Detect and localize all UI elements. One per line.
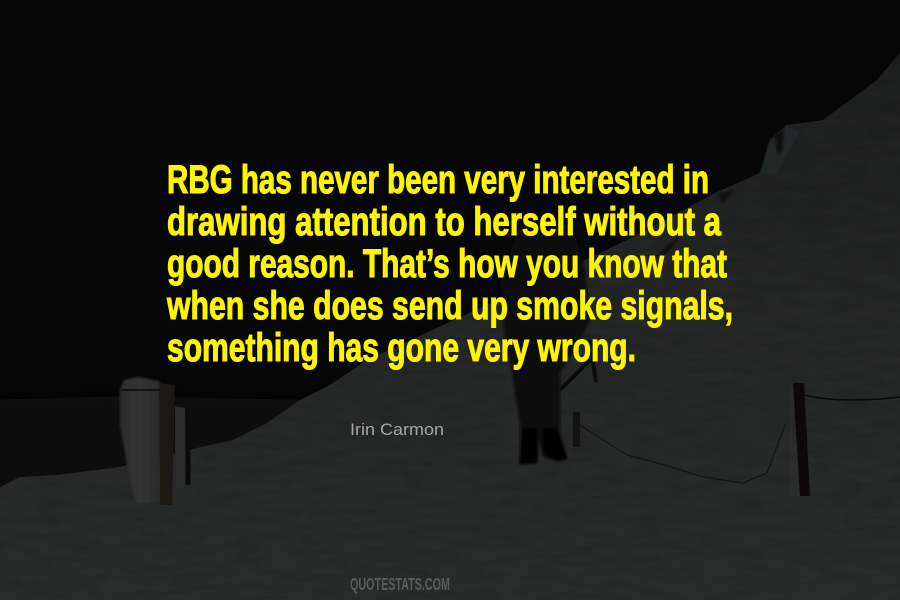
author attribution: Irin Carmon xyxy=(350,420,444,439)
quote text: good reason. That’s how you know that xyxy=(167,242,727,286)
quote text: something has gone very wrong. xyxy=(167,326,636,370)
small fence post xyxy=(573,412,580,447)
right fence post xyxy=(790,383,810,496)
rope xyxy=(804,395,900,400)
fence chain xyxy=(580,425,785,483)
trekking pole xyxy=(560,340,596,390)
background: distant dark slope xyxy=(0,396,320,520)
quote text: RBG has never been very interested in xyxy=(167,158,709,202)
quote text: drawing attention to herself without a xyxy=(167,200,722,244)
quote text: when she does send up smoke signals, xyxy=(166,284,733,328)
hiker silhouette xyxy=(500,225,596,464)
hanging chain xyxy=(186,408,190,485)
quote text xyxy=(166,158,733,370)
watermark: QUOTESTATS.COM xyxy=(350,574,450,594)
snow-wrapped left post xyxy=(120,377,188,505)
